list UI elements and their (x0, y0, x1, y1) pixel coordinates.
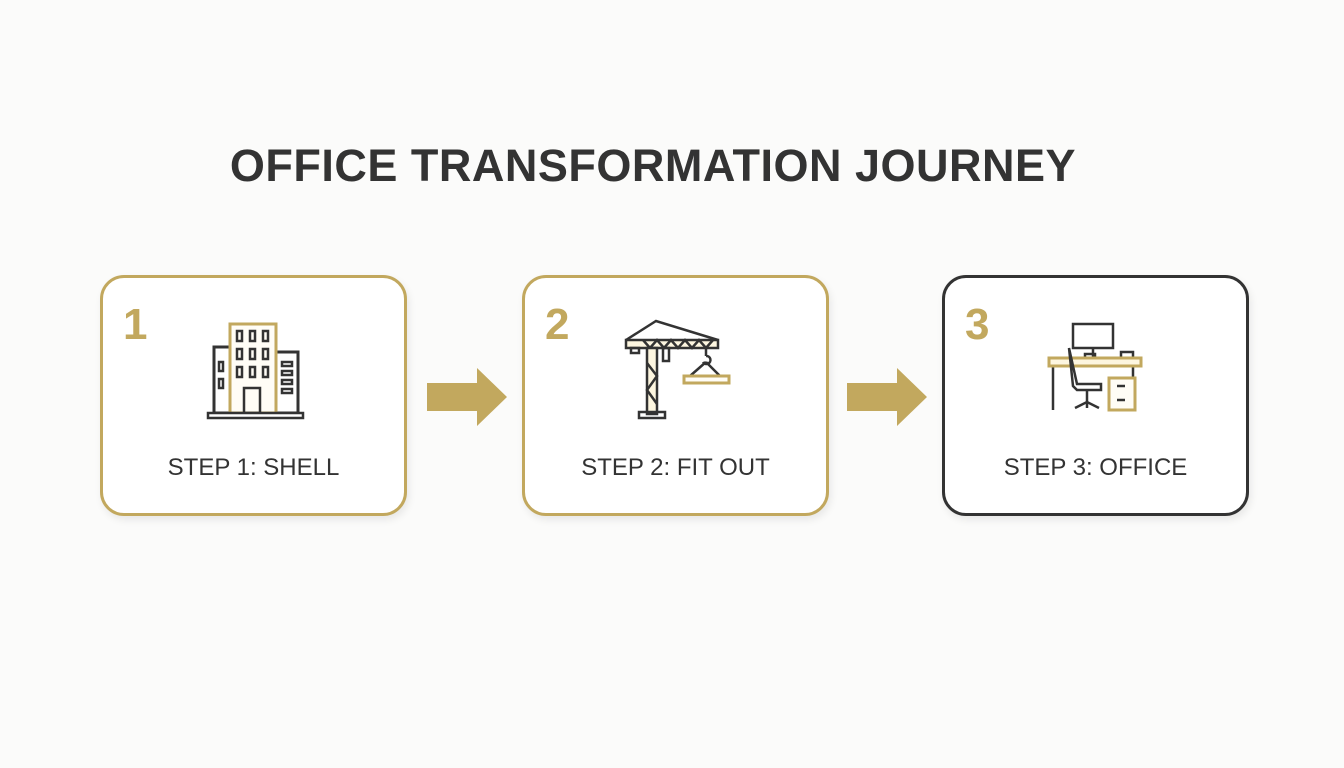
label: STEP 2: FIT OUT (581, 454, 770, 481)
arrow 2 (847, 368, 927, 426)
panel: step 1 (100, 275, 407, 516)
icon: crane (624, 320, 730, 420)
label: STEP 3: OFFICE (1004, 454, 1187, 481)
number 2: 2 (545, 300, 569, 349)
number 1: 1 (123, 300, 147, 349)
number 3: 3 (965, 300, 989, 349)
title: OFFICE TRANSFORMATION JOURNEY (230, 140, 1076, 191)
icon: building (206, 322, 304, 420)
arrow 1 (427, 368, 507, 426)
icon: office desk (1048, 322, 1142, 412)
panel: step 3 (942, 275, 1249, 516)
label: STEP 1: SHELL (168, 454, 339, 481)
panel: step 2 (522, 275, 829, 516)
